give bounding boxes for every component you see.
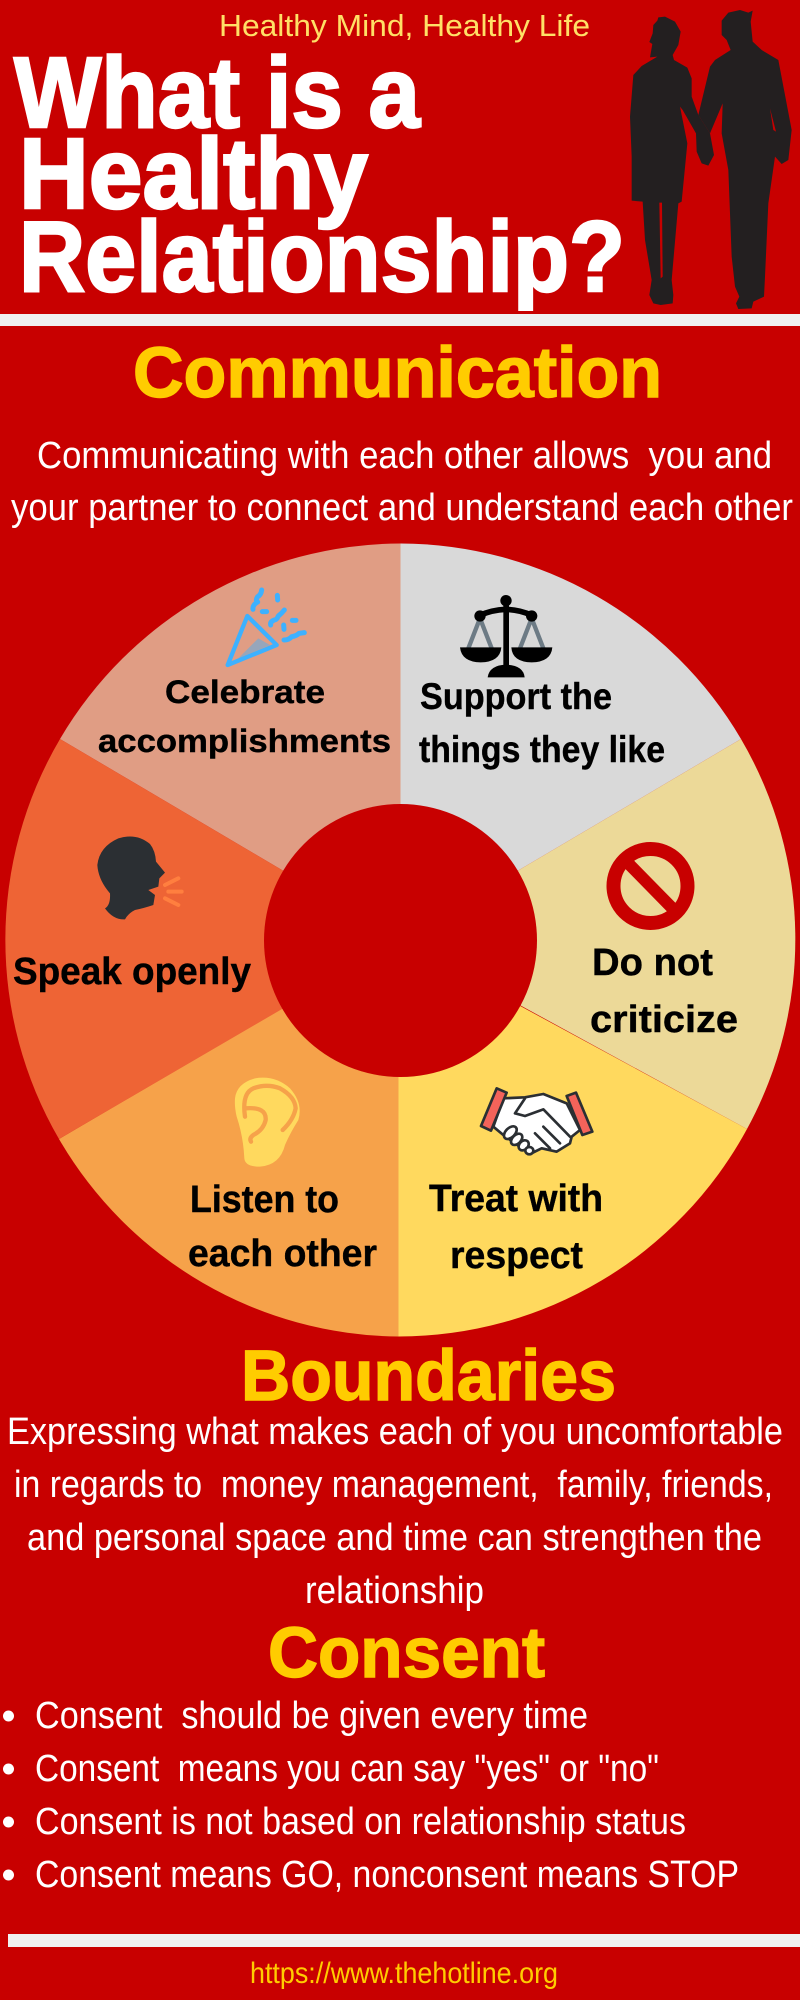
- segment: speak openly: [5, 739, 400, 1139]
- icon: couple silhouette: [630, 10, 792, 309]
- icon: ear: [235, 1078, 300, 1167]
- label: celebrate accomplishments: accomplishments: [98, 723, 391, 759]
- title: Relationship?: [19, 201, 625, 313]
- segment: treat with respect: [398, 940, 747, 1336]
- heading: Consent: Consent: [268, 1614, 545, 1693]
- label: support the things they like: Support the: [420, 676, 612, 717]
- text block: boundaries: relationship: [305, 1570, 484, 1612]
- title: [14, 37, 625, 313]
- icon: no sign: [614, 849, 688, 923]
- title: Healthy: [19, 118, 368, 230]
- label: treat with respect: [429, 1178, 603, 1277]
- segment: listen: [59, 940, 398, 1336]
- divider bar: top: [0, 314, 800, 326]
- segment: celebrate: [60, 544, 400, 940]
- source url: https://www.thehotline.org: [250, 1957, 558, 1990]
- icon: scales: [460, 595, 552, 677]
- segment: support: [400, 544, 741, 940]
- label: do not criticize: Do not: [592, 942, 713, 984]
- label: listen to each other: [188, 1179, 377, 1275]
- divider bar: bottom: [8, 1934, 800, 1947]
- heading: Boundaries: Boundaries: [241, 1337, 616, 1416]
- label: speak openly: Speak openly: [13, 951, 251, 993]
- list: consent bullets: Consent is not based on relationship status: [35, 1801, 686, 1843]
- label: listen to each other: Listen to: [190, 1179, 339, 1221]
- center circle: [264, 804, 537, 1077]
- tagline: Healthy Mind, Healthy Life: [219, 8, 590, 43]
- label: treat with respect: Treat with: [429, 1178, 603, 1220]
- label: listen to each other: each other: [188, 1233, 377, 1275]
- icon: speaking head: [97, 836, 182, 919]
- label: support the things they like: [419, 676, 665, 770]
- list: consent bullets: [3, 1695, 739, 1896]
- icon: party popper: [228, 590, 304, 665]
- text block: boundaries: [7, 1411, 783, 1612]
- heading: Communication: Communication: [133, 334, 662, 413]
- label: do not criticize: criticize: [590, 999, 738, 1041]
- text block: communication intro: [11, 435, 793, 529]
- chart: communication wheel: [5, 544, 795, 1336]
- list: consent bullets: Consent means you can say "yes" or "no": [35, 1748, 659, 1790]
- label: do not criticize: [590, 942, 738, 1041]
- label: treat with respect: respect: [450, 1235, 583, 1277]
- label: support the things they like: things they like: [419, 729, 665, 770]
- title: What is a: [14, 37, 421, 149]
- label: celebrate accomplishments: [98, 674, 391, 759]
- icon: handshake: [481, 1088, 592, 1154]
- list: consent bullets: Consent should be given every time: [35, 1695, 588, 1737]
- segment: do not criticize: [400, 739, 795, 1129]
- label: celebrate accomplishments: Celebrate: [165, 674, 325, 710]
